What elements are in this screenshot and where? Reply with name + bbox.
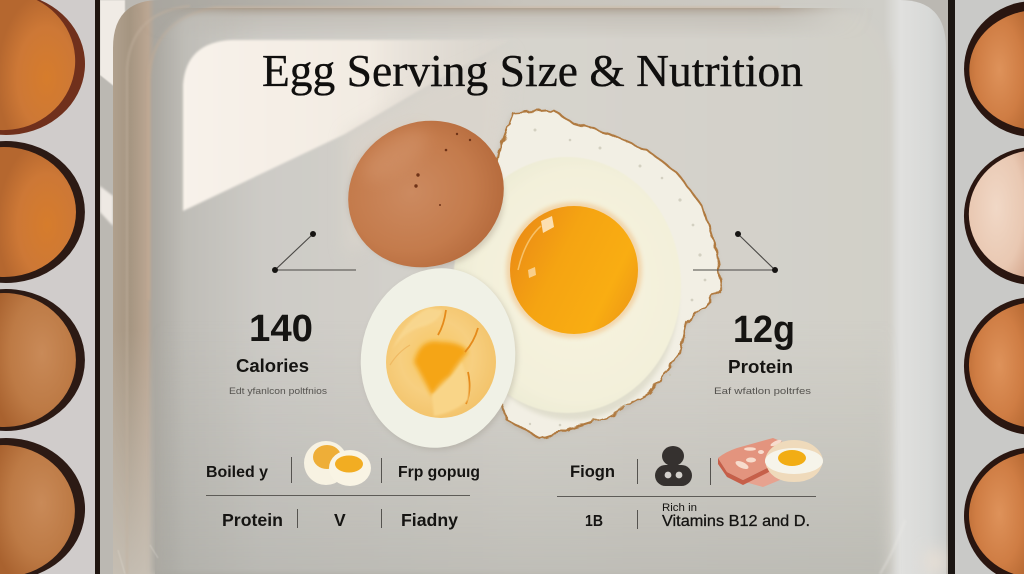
illustration: fried egg	[453, 110, 722, 440]
table: left serving info: Fiadny	[401, 510, 458, 530]
icon: left egg 2	[0, 141, 85, 283]
stat: protein: Eaf wfatlon poltrfes	[714, 386, 811, 397]
table: right serving info: Rich in	[662, 502, 697, 514]
stat: protein: Protein	[728, 356, 793, 377]
stat: protein	[714, 309, 811, 397]
icon: right egg 4	[964, 448, 1024, 574]
egg white	[466, 180, 678, 420]
boiled yolk	[386, 306, 496, 418]
carton divider left	[95, 0, 100, 574]
stat: calories: 140	[249, 308, 313, 350]
table: left serving info: V	[334, 510, 346, 530]
illustration: whole brown egg	[324, 95, 528, 293]
table: left serving info	[206, 441, 480, 530]
table: left serving info: Frp gopuıg	[398, 464, 480, 481]
stat: protein: 12g	[733, 309, 795, 351]
icon: dark figure	[655, 446, 692, 486]
icon: left egg 1	[0, 0, 85, 135]
tray inner floor	[152, 10, 892, 574]
title: Egg Serving Size & Nutrition	[262, 45, 803, 96]
callout: left connector	[272, 231, 356, 273]
table: right serving info: Vitamins B12 and D.	[662, 513, 810, 530]
table: right serving info	[557, 438, 823, 530]
stat: calories	[229, 308, 327, 397]
icon: right egg 1	[964, 2, 1024, 136]
icon: boiled egg halves	[304, 441, 371, 486]
table: left serving info: Boiled y	[206, 464, 268, 481]
stat: calories: Edt yfanlcon poltfnios	[229, 386, 327, 397]
sunlit patch	[183, 40, 510, 255]
icon: right egg 3	[964, 298, 1024, 434]
icon: ham and egg	[718, 438, 823, 487]
stat: calories: Calories	[236, 355, 309, 376]
crust bubbles	[529, 128, 706, 426]
left carton with eggs	[0, 0, 85, 574]
yolk	[506, 202, 642, 338]
icon: right egg 2	[964, 148, 1024, 284]
carton divider right	[948, 0, 955, 574]
table: left serving info: Protein	[222, 510, 283, 530]
right carton with eggs	[964, 2, 1024, 574]
icon: left egg 4	[0, 438, 85, 574]
callout: right connector	[693, 231, 778, 273]
table: right serving info: Fiogn	[570, 463, 615, 481]
table: right serving info: 1B	[585, 513, 603, 530]
illustration: boiled egg half	[349, 258, 529, 460]
icon: left egg 3	[0, 289, 85, 431]
